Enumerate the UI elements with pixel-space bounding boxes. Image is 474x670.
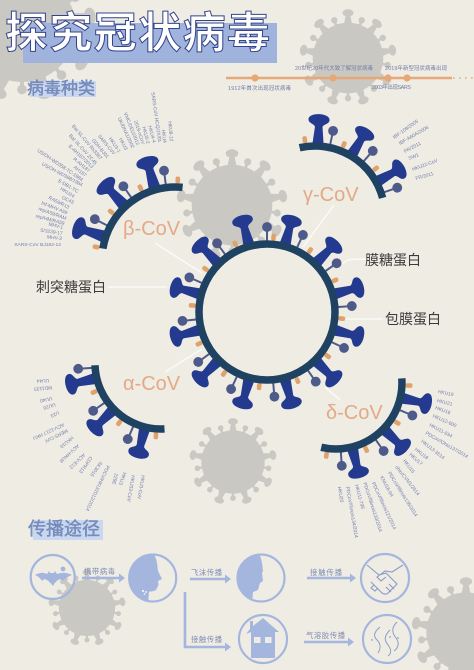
label: gamma: γ-CoV [303, 184, 359, 206]
beta strain list: GDH-BJ01 [90, 138, 110, 160]
arrow: carries virus: 携带病毒 [84, 567, 116, 576]
alpha arc [63, 363, 164, 461]
beta strain list: RA59/R13 [47, 195, 70, 211]
arrow: carries virus [82, 567, 125, 582]
alpha strain list: UU20 [42, 401, 56, 411]
gray virus: lower middle [189, 418, 277, 505]
alpha strain list: HKU10 [58, 434, 74, 449]
beta strain list: rep/A59/RAM [37, 206, 67, 222]
delta strain list: HKU20 [336, 486, 344, 503]
label: delta: δ-CoV [326, 402, 383, 424]
delta strain list: HKU11-934 [428, 422, 453, 440]
beta strain list: VMC/DEU/2012 [122, 112, 141, 147]
delta strain list: KNU16-04 [378, 475, 394, 498]
delta strain list: HKU18 [413, 447, 429, 461]
alpha strain list: 229E [110, 472, 119, 486]
beta strain list: Inf-MHV A59 [40, 200, 68, 216]
beta arc [70, 154, 183, 250]
gamma strain list: SW1 [408, 152, 420, 162]
delta strain list: PDCoV/Ohio137/2014 [424, 431, 469, 460]
arrow: aerosol transmission: 气溶胶传播 [306, 631, 346, 640]
arrow: contact transmission: 接触传播 [310, 568, 343, 577]
beta strain list: rep/HM/RA59 [35, 213, 65, 227]
alpha strain list: HKU3 [117, 471, 127, 486]
arrow: contact transmission [307, 568, 356, 582]
gamma strain list: IBF-109/2005 [392, 119, 420, 141]
gamma strain list: IBF-A60A/2006 [398, 125, 430, 147]
delta strain list: HKU17 [408, 452, 424, 467]
icon: face receiving [237, 550, 284, 604]
gray virus: bottom left [48, 569, 126, 646]
arrow: droplet transmission: 飞沫传播 [191, 568, 223, 577]
alpha strain list: ACV-1217 HKU [31, 421, 65, 441]
delta strain list: PDCoV/Illinois136/2014 [386, 471, 419, 518]
beta strain list: UK/DNA1/2002 [116, 117, 135, 150]
beta strain list: AH187 [72, 165, 88, 179]
alpha strain list: PDCV/HKU/2012/2014 [84, 464, 110, 512]
label: envelope protein: 包膜蛋白 [385, 311, 441, 327]
gamma strain list: HKU22-CoV [411, 158, 439, 173]
label: spike glycoprotein: 刺突糖蛋白 [36, 279, 106, 295]
timeline [226, 64, 474, 92]
arrow: contact transmission branch [185, 592, 231, 652]
heading: virus types: 病毒种类 [27, 79, 95, 98]
gamma strain list: FR/2011 [403, 141, 422, 155]
delta strain list [336, 389, 469, 538]
beta strain list: HKU3-1 [107, 136, 122, 154]
beta strain list: HKU24 [59, 186, 76, 200]
alpha strain list: MD1133 [33, 384, 52, 392]
delta arc [321, 378, 434, 481]
heading: transmission routes: 传播途径 [28, 519, 100, 539]
alpha strain list: HKU3-CoV [135, 475, 146, 500]
alpha strain list: UU40 [39, 395, 53, 403]
alpha strain list [31, 377, 146, 512]
delta strain list: PDCoV/Illinois121/2014 [370, 481, 397, 531]
beta strain list: HKU8-12 [166, 121, 174, 142]
gamma arc [300, 114, 409, 198]
delta strain list: HKU11-796 [353, 484, 365, 510]
alpha strain list: CDPR13 [77, 455, 93, 474]
icon: face exhaling [129, 550, 176, 604]
delta strain list: PDCoV/Illinois134/2014 [344, 486, 359, 538]
alpha strain list: HKU33-CoV [125, 475, 136, 503]
delta strain list: HKU15 [401, 459, 416, 475]
beta strain list: MHV-1 [48, 222, 64, 231]
beta strain list: HKU4 [160, 130, 167, 144]
alpha strain list: UU44 [36, 377, 49, 383]
beta strain list: R-AH187 [72, 156, 91, 174]
alpha strain list: U23 [49, 409, 60, 419]
delta strain list: ohio/CVM1/2014 [393, 465, 421, 497]
timeline: 2003年出现SARS [372, 83, 411, 91]
gamma strain list [392, 119, 439, 182]
delta strain list: HKU16 [434, 405, 451, 416]
beta strain list: US/OH-WD358-TC-1984 [36, 148, 84, 183]
alpha strain list: SK3015 [88, 460, 103, 478]
label: membrane glycoprotein: 膜糖蛋白 [365, 252, 421, 268]
gray virus: top left [0, 0, 97, 101]
alpha strain list: ACV-HKU8 [58, 443, 80, 464]
timeline: 20世纪20年代大致了解冠状病毒 [295, 64, 374, 72]
beta strain list: HKU4-4 [146, 125, 157, 144]
icon: aerosol [363, 615, 411, 663]
arrow: contact transmission branch: 接触传播 [191, 635, 223, 644]
timeline: 1912年首次出现冠状病毒 [228, 84, 292, 92]
beta strain list: SARS-CoV HCQ/JX/01 [149, 92, 162, 143]
beta strain list: 2019-nCoV [132, 120, 146, 146]
icon: bat [31, 555, 75, 599]
label: beta: β-CoV [123, 218, 181, 240]
beta strain list: E-DB1-TC [57, 178, 80, 195]
icon: house [239, 615, 287, 663]
timeline: 2019年新型冠状病毒出现 [385, 64, 448, 72]
arrow: aerosol transmission [304, 631, 354, 646]
beta strain list: MHV-3 [47, 234, 62, 242]
alpha strain list: ACV-E12 [67, 452, 86, 470]
gray virus: centre [176, 149, 288, 260]
icon: handshake [361, 554, 409, 602]
gray virus: top right [299, 9, 397, 106]
beta strain list: US/OH-WD388/1984 [40, 162, 84, 188]
gray virus: bottom right [411, 577, 474, 670]
beta strain list: SARS-CoV BJ182-12 [14, 242, 61, 248]
beta strain list: OC43 [61, 195, 75, 206]
label: alpha: α-CoV [123, 373, 181, 395]
beta strain list: HKU3 [117, 137, 129, 152]
delta strain list: HKU13-3514 [419, 439, 446, 461]
central virus ring [168, 213, 366, 411]
beta strain list: Bat SL-CoV ZC45 [67, 133, 98, 167]
delta strain list: HKU19 [437, 389, 454, 398]
alpha strain list: MERS CoV [43, 427, 69, 444]
beta strain list [14, 92, 174, 248]
beta strain list: HKU5-2 [140, 126, 151, 145]
gamma strain list: FR/2011 [415, 171, 435, 182]
beta strain list: SARS-CoV [96, 134, 117, 157]
arrow: droplet transmission [190, 568, 231, 584]
title: 探究冠状病毒 [5, 10, 270, 58]
delta strain list: HKU12-600 [431, 413, 458, 429]
delta strain list: HKU21 [436, 398, 453, 408]
beta strain list: S/3239-17 [40, 228, 63, 237]
beta strain list: E-AH187/2013 [67, 144, 95, 170]
beta strain list: Bat SL-CoV Rs3367 [70, 124, 103, 161]
leader lines [108, 205, 383, 400]
delta strain list: PDCoV/Illinois133/2014 [361, 482, 383, 533]
